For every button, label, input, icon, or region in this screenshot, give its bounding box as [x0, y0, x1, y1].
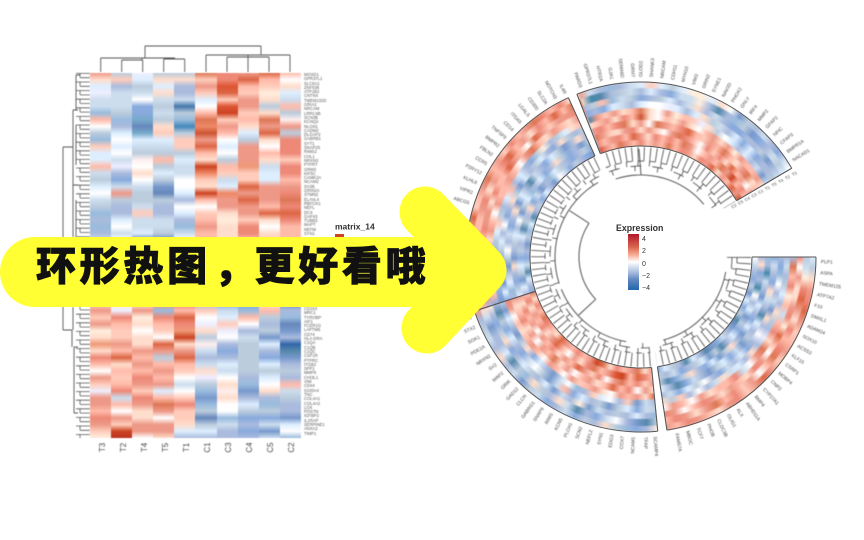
left heatmap legend: matrix_14 — [335, 222, 375, 232]
circular gene labels: TFAP — [642, 437, 648, 449]
circular gene labels: KLHL6 — [462, 175, 478, 186]
circular gene labels: T1 — [764, 184, 771, 191]
column labels under left heatmap: T2 — [119, 442, 128, 452]
left heatmap lower half — [89, 307, 302, 439]
circular gene labels: C2 — [730, 202, 738, 209]
circular gene labels: PARD3 — [572, 72, 583, 89]
circular gene labels: C1 — [757, 188, 765, 195]
circular gene labels: SLC2A — [535, 90, 549, 106]
circular gene labels: PHOX2 — [730, 86, 744, 104]
circular gene labels: GRIK — [500, 378, 513, 391]
circular gene labels: CNP2 — [769, 379, 783, 393]
circular gene labels: BMPR2 — [484, 134, 501, 149]
row gene labels lower: CD163 MRC1 TYROBP AIF1 FCER1G LAPTM5 CD74 HLA-DRA C1QA C1QB C1QC CSF1R PTPRC ITGB2 SPP1 MMP9 CHI3L1 VIM CD44 S100A4 TNC COL4A1 COL4A2 LOX POSTN IGFBP2 IL1RAP SERPINE1 ANXA2 TIMP1 — [304, 306, 325, 436]
circular gene labels: NEFL2 — [585, 429, 595, 445]
circular gene labels: CFAP3 — [779, 132, 795, 146]
circular gene labels: SV2 — [488, 362, 499, 372]
circular gene labels: ABCG5 — [453, 196, 470, 206]
legend title: Expression — [616, 223, 663, 233]
circular gene labels: STX2 — [463, 325, 477, 335]
legend colour bar — [628, 234, 639, 290]
circular gene labels: IRF4 — [748, 104, 759, 116]
column labels under left heatmap: C1 — [203, 442, 212, 453]
circular gene labels: HTR2A — [594, 66, 604, 83]
circular gene labels: CSRP1 — [784, 362, 800, 377]
circular gene labels: GPR37L1 — [582, 63, 594, 85]
circular gene labels: MAP2 — [491, 370, 505, 384]
circular gene labels: NAV2D — [721, 81, 734, 98]
row gene labels upper: MOXD1 GPR37L1 SLC6A1 ZNF536 ATP1B2 CNTN4 TMEM132D GRIA2 NRCAM LRRC4B SCN3B KCNQ2 NLGN1 CADM2 DLGAP2 GABRB1 SYT1 SNAP25 RIMS2 CHL1 NRXN3 PTPRT GRM3 KIF5C CAMK2A NCAM2 SV2B GRIN2A STMN2 ELAVL4 RBFOX1 NEFL DCX GAP43 TUBB3 MAPT NEFM SYN1 — [304, 72, 326, 236]
circular gene labels: BMP4 — [753, 394, 766, 409]
circular gene labels: CYP27A1 — [761, 387, 780, 407]
circular gene labels: CD300 — [526, 96, 540, 112]
circular gene labels: GJA1 — [606, 67, 614, 80]
circular gene labels: T3 — [791, 170, 798, 177]
circular gene labels: NCAM1 — [630, 436, 637, 454]
circular gene labels: ABHD11A — [744, 401, 762, 423]
circular gene labels: GRM7 — [629, 63, 636, 78]
circular gene labels: PHOB — [705, 423, 716, 438]
circular gene labels: ADAM24 — [806, 324, 826, 337]
circular gene labels: CDH11 — [670, 64, 679, 80]
circular gene labels: GNLY — [739, 95, 752, 110]
circular gene labels: MYH10 — [681, 66, 690, 83]
circular gene labels: COX7 — [619, 436, 626, 449]
circular gene labels: ASPA — [820, 270, 834, 278]
circular gene labels: NACAD1 — [792, 148, 811, 163]
column labels under left heatmap: T3 — [98, 442, 107, 452]
circular gene labels: NOTCH3 — [543, 80, 558, 101]
column labels under left heatmap: C5 — [266, 442, 275, 453]
circular gene labels: GAD12 — [505, 386, 520, 402]
circular gene labels: IL4R — [558, 84, 568, 96]
column labels under left heatmap: C2 — [287, 442, 296, 453]
circular gene labels: BMPR1A — [786, 138, 806, 155]
circular gene labels: GFAP2 — [765, 115, 780, 130]
column labels under left heatmap: T1 — [182, 442, 191, 452]
column labels under left heatmap: C3 — [224, 442, 233, 453]
circular gene labels: NRXN2 — [475, 353, 492, 367]
circular gene labels: VIM3 — [691, 73, 700, 86]
circular gene labels: MOBP4 — [777, 371, 793, 387]
column labels under left heatmap: T4 — [140, 442, 149, 452]
circular gene labels: ACSS3 — [796, 344, 813, 357]
circular gene labels: TCF7 — [695, 427, 704, 441]
circular gene labels: SEMA6D — [617, 58, 625, 79]
circular gene labels: SYNE1 — [711, 77, 723, 94]
circular gene labels: GRIN2 — [701, 73, 712, 89]
legend tick labels: 4 2 0 −2 −4 — [642, 236, 650, 292]
expression legend — [616, 223, 663, 292]
circular gene labels: TMEM125 — [818, 281, 842, 291]
column labels under left heatmap: C4 — [245, 442, 254, 453]
circular gene labels: TNFSF9 — [490, 125, 508, 141]
circular gene labels: OLIG1 — [725, 413, 737, 429]
circular gene labels: MBOC — [684, 430, 694, 446]
circular gene labels: KCNK3 — [455, 315, 473, 326]
circular gene labels: C3 — [750, 191, 758, 199]
circular gene labels: T5 — [771, 181, 778, 188]
circular gene labels: NFIC — [772, 126, 785, 138]
circular gene labels: SYN1 — [596, 432, 605, 446]
circular gene labels: F10 — [813, 303, 823, 311]
circular gene labels: C4 — [744, 195, 751, 202]
circular gene labels: DMXL1 — [810, 313, 827, 324]
left heatmap upper half — [90, 72, 302, 237]
circular gene labels: SCN2 — [574, 426, 584, 440]
circular gene labels: GABRG1 — [520, 400, 537, 420]
circular gene labels: EDG3 — [608, 434, 615, 448]
circular gene labels: CCR5 — [474, 155, 488, 167]
circular gene labels: LGALS — [516, 103, 531, 118]
circular gene labels: ITGA5 — [509, 111, 523, 126]
circular gene labels: KCN5 — [553, 417, 565, 431]
circular gene labels: ALX — [735, 408, 745, 419]
column labels under left heatmap: T5 — [161, 442, 170, 452]
circular gene labels: ATP7A2 — [816, 292, 835, 302]
circular gene labels: SHANK3 — [649, 58, 656, 78]
circular gene labels: NRCAM — [660, 60, 668, 79]
circular gene labels: T4 — [778, 177, 785, 184]
circular gene labels: SOX10 — [801, 334, 818, 346]
circular gene labels: PLP1 — [821, 259, 833, 266]
circular gene labels: PDE1A — [470, 344, 487, 357]
arrow caption: 环形热图，更好看哦 — [36, 245, 429, 289]
circular gene labels: P2RY12 — [464, 163, 483, 177]
circular gene labels: FBLN2 — [478, 145, 494, 158]
circular gene labels: C5 — [737, 199, 745, 206]
circular gene labels: RIMS — [544, 412, 555, 426]
circular gene labels: SNAP9 — [532, 406, 546, 423]
circular gene labels: SGK1 — [467, 334, 482, 346]
circular gene labels: FAM57A — [673, 433, 683, 453]
circular gene labels: CD14 — [502, 120, 515, 133]
circular gene labels: GLOD2 — [638, 60, 644, 77]
circular gene labels: KLF15 — [790, 353, 805, 366]
circular gene labels: VIPR2 — [459, 186, 474, 196]
circular gene labels: MMP2 — [757, 108, 770, 123]
circular heatmap rings — [468, 82, 816, 433]
circular gene labels: PLCH1 — [563, 422, 574, 438]
circular gene labels: T2 — [784, 174, 791, 181]
circular gene labels: SCAMP4 — [652, 436, 659, 457]
circular gene labels: CLCN — [515, 393, 529, 407]
circular gene labels: CLDC3B — [715, 418, 729, 438]
